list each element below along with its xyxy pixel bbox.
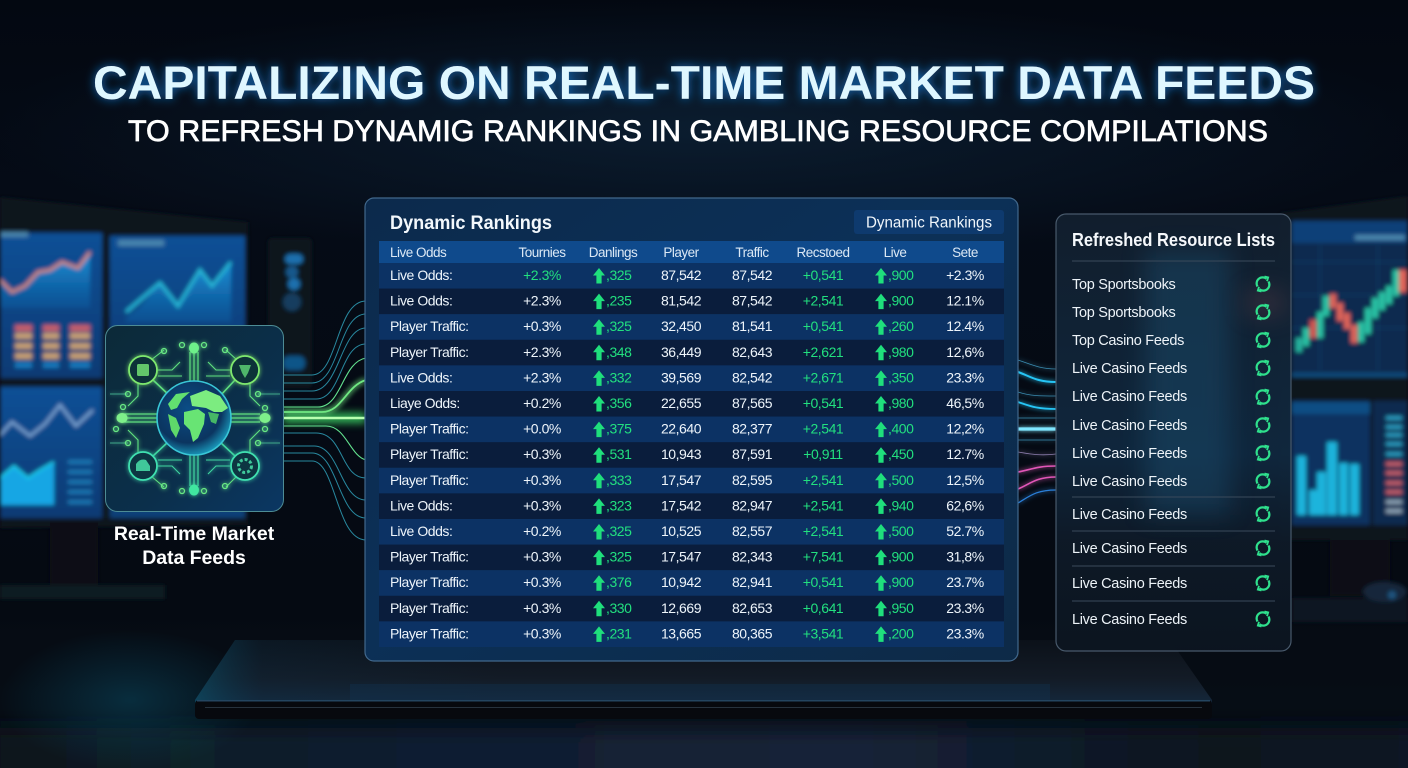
heading: data feeds label: Real-Time Market	[114, 523, 275, 545]
row 7: +2,541	[803, 421, 844, 437]
list item 4: Live Casino Feeds	[1072, 361, 1187, 377]
table header: Tournies	[518, 245, 566, 260]
row 10: Live Odds:	[390, 497, 452, 513]
row 4: +2.3%	[523, 344, 561, 360]
heading: data feeds label: Data Feeds	[142, 547, 246, 569]
row 1: +0,541	[803, 267, 844, 283]
row 5: +2.3%	[523, 369, 561, 385]
row 5: 82,542	[732, 369, 773, 385]
row 12: Player Traffic:	[390, 549, 469, 565]
table header	[379, 241, 1004, 263]
row 15: +3,541	[803, 625, 844, 641]
row 7: 12,2%	[946, 421, 984, 437]
row 6	[379, 391, 1004, 417]
row 6: ,980	[888, 395, 914, 411]
row 14: 82,653	[732, 600, 773, 616]
row 9: +0.3%	[523, 472, 561, 488]
list item 12: Live Casino Feeds	[1072, 612, 1187, 628]
button: dynamic rankings: Dynamic Rankings	[866, 214, 992, 232]
icon: document node	[129, 356, 157, 384]
table header: Live Odds	[390, 245, 447, 260]
row 11: 82,557	[732, 523, 773, 539]
circuit traces	[110, 348, 280, 490]
button: dynamic rankings	[854, 210, 1004, 234]
row 1: 87,542	[732, 267, 773, 283]
row 14: ,950	[888, 600, 914, 616]
list item 9	[1072, 506, 1269, 523]
row 5: 39,569	[661, 369, 702, 385]
row 3: 32,450	[661, 318, 702, 334]
row 6: +0.2%	[523, 395, 561, 411]
list item 2	[1072, 304, 1269, 321]
row 13: ,900	[888, 574, 914, 590]
row 13: +0,541	[803, 574, 844, 590]
list item 12	[1072, 612, 1269, 628]
row 12: ,900	[888, 549, 914, 565]
icon: cloud node	[129, 452, 157, 480]
row 4: 82,643	[732, 344, 773, 360]
row 11: ,325	[606, 523, 632, 539]
row 14	[379, 596, 1004, 621]
row 14: ,330	[606, 600, 632, 616]
panel heading: Dynamic Rankings	[390, 213, 552, 234]
list item 8: Live Casino Feeds	[1072, 474, 1187, 490]
row 6: Liaye Odds:	[390, 395, 460, 411]
row 5: +2,671	[803, 369, 844, 385]
row 10: +0.3%	[523, 497, 561, 513]
row 2: Live Odds:	[390, 293, 452, 309]
row 1: Live Odds:	[390, 267, 452, 283]
row 11	[379, 519, 1004, 545]
row 11: 52.7%	[946, 523, 984, 539]
row 9: 12,5%	[946, 472, 984, 488]
row 6: 46,5%	[946, 395, 984, 411]
row 8: ,450	[888, 446, 914, 462]
row 1: ,900	[888, 267, 914, 283]
list item 7: Live Casino Feeds	[1072, 446, 1187, 462]
row 13: Player Traffic:	[390, 574, 469, 590]
list item 10: Live Casino Feeds	[1072, 541, 1187, 557]
row 4: +2,621	[803, 344, 844, 360]
row 10: +2,541	[803, 497, 844, 513]
heading: data feeds label	[114, 523, 275, 569]
circuit nodes	[114, 342, 270, 496]
row 7: ,400	[888, 421, 914, 437]
row 14: +0,641	[803, 600, 844, 616]
table header: Recstoed	[796, 245, 850, 260]
row 4: ,348	[606, 344, 632, 360]
row 3	[379, 314, 1004, 340]
table header: Sete	[952, 245, 978, 260]
list item 5: Live Casino Feeds	[1072, 389, 1187, 405]
list item 10	[1072, 540, 1269, 557]
list item 2: Top Sportsbooks	[1072, 305, 1176, 321]
row 11: Live Odds:	[390, 523, 452, 539]
row 15: ,200	[888, 625, 914, 641]
row 6: +0,541	[803, 395, 844, 411]
row 1: ,325	[606, 267, 632, 283]
row 10: 82,947	[732, 497, 773, 513]
icon: network node	[231, 452, 259, 480]
panel: dynamic rankings	[365, 198, 1018, 661]
desk platform	[0, 630, 1408, 768]
row 12: 17,547	[661, 549, 702, 565]
row 13: 10,942	[661, 574, 702, 590]
row 4	[379, 340, 1004, 365]
rankings table	[379, 263, 1004, 647]
row 15	[379, 621, 1004, 647]
row 12: ,325	[606, 549, 632, 565]
row 2: 12.1%	[946, 293, 984, 309]
table header: Danlings	[589, 245, 638, 260]
row 13	[379, 570, 1004, 596]
table header: Live	[884, 245, 906, 260]
row 11: 10,525	[661, 523, 702, 539]
row 14: 12,669	[661, 600, 702, 616]
row 4: 36,449	[661, 344, 702, 360]
row 5: Live Odds:	[390, 369, 452, 385]
row 12: 82,343	[732, 549, 773, 565]
arrow: right data streams	[1018, 360, 1056, 503]
row 7: 22,640	[661, 421, 702, 437]
row 15: ,231	[606, 625, 632, 641]
list item 7	[1072, 446, 1269, 462]
row 8: Player Traffic:	[390, 446, 469, 462]
row 2: ,235	[606, 293, 632, 309]
row 15: +0.3%	[523, 625, 561, 641]
list item 8	[1072, 474, 1269, 490]
row 13: ,376	[606, 574, 632, 590]
row 9: ,333	[606, 472, 632, 488]
row 6: 87,565	[732, 395, 773, 411]
row 2: ,900	[888, 293, 914, 309]
row 6: ,356	[606, 395, 632, 411]
row 8: 87,591	[732, 446, 773, 462]
list item 1: Top Sportsbooks	[1072, 277, 1176, 293]
row 2: +2,541	[803, 293, 844, 309]
subtitle: TO REFRESH DYNAMIG RANKINGS IN GAMBLING RESOURCE COMPILATIONS	[128, 115, 1268, 148]
row 4: Player Traffic:	[390, 344, 469, 360]
row 3: +0.3%	[523, 318, 561, 334]
row 10: 17,542	[661, 497, 702, 513]
row 7: ,375	[606, 421, 632, 437]
row 2: +2.3%	[523, 293, 561, 309]
row 7	[379, 417, 1004, 442]
row 3: Player Traffic:	[390, 318, 469, 334]
title: CAPITALIZING ON REAL-TIME MARKET DATA FEEDS	[93, 56, 1315, 109]
list item 11	[1072, 576, 1269, 592]
table header: Traffic	[735, 245, 769, 260]
row 2	[379, 289, 1004, 314]
row 9: ,500	[888, 472, 914, 488]
list item 6: Live Casino Feeds	[1072, 418, 1187, 434]
row 1: +2.3%	[946, 267, 984, 283]
list item 6	[1072, 418, 1269, 434]
row 10	[379, 493, 1004, 519]
row 15: 80,365	[732, 625, 773, 641]
icon: brain node	[231, 356, 259, 384]
row 14: 23.3%	[946, 600, 984, 616]
arrow: left data streams	[283, 301, 366, 540]
row 9: 17,547	[661, 472, 702, 488]
row 8: +0,911	[803, 446, 843, 462]
row 10: ,323	[606, 497, 632, 513]
row 14: +0.3%	[523, 600, 561, 616]
row 13: 23.7%	[946, 574, 984, 590]
row 1	[379, 263, 1004, 289]
row 11: +2,541	[803, 523, 844, 539]
right background monitor	[1280, 196, 1408, 622]
row 9: Player Traffic:	[390, 472, 469, 488]
row 15: Player Traffic:	[390, 625, 469, 641]
list item 9: Live Casino Feeds	[1072, 507, 1187, 523]
row 3: 81,541	[732, 318, 773, 334]
row 9: +2,541	[803, 472, 844, 488]
list item 4	[1072, 360, 1269, 377]
panel: data feed icon card	[106, 326, 284, 512]
icon: globe	[157, 381, 231, 455]
row 8: ,531	[606, 446, 632, 462]
row 12	[379, 545, 1004, 570]
row 1: +2.3%	[523, 267, 561, 283]
panel: refreshed resource lists	[1056, 214, 1291, 651]
row 1: 87,542	[661, 267, 702, 283]
list heading: Refreshed Resource Lists	[1072, 230, 1275, 250]
row 13: +0.3%	[523, 574, 561, 590]
row 8: +0.3%	[523, 446, 561, 462]
row 9	[379, 468, 1004, 493]
list item 5	[1072, 389, 1269, 405]
row 4: 12,6%	[946, 344, 984, 360]
list item 3	[1072, 332, 1269, 349]
row 5: ,332	[606, 369, 632, 385]
row 10: 62,6%	[946, 497, 984, 513]
row 14: Player Traffic:	[390, 600, 469, 616]
row 11: ,500	[888, 523, 914, 539]
row 2: 81,542	[661, 293, 702, 309]
left background monitor	[0, 197, 312, 599]
list item 3: Top Casino Feeds	[1072, 333, 1184, 349]
row 3: 12.4%	[946, 318, 984, 334]
row 8: 10,943	[661, 446, 702, 462]
row 5	[379, 365, 1004, 391]
row 11: +0.2%	[523, 523, 561, 539]
row 8: 12.7%	[946, 446, 984, 462]
list item 11: Live Casino Feeds	[1072, 576, 1187, 592]
list item 1	[1072, 276, 1269, 293]
row 12: +7,541	[803, 549, 844, 565]
row 3: ,260	[888, 318, 914, 334]
row 7: +0.0%	[523, 421, 561, 437]
row 15: 23.3%	[946, 625, 984, 641]
row 15: 13,665	[661, 625, 702, 641]
row 7: Player Traffic:	[390, 421, 469, 437]
table header: Player	[663, 245, 700, 260]
row 13: 82,941	[732, 574, 773, 590]
row 6: 22,655	[661, 395, 702, 411]
row 2: 87,542	[732, 293, 773, 309]
row 9: 82,595	[732, 472, 773, 488]
row 5: ,350	[888, 369, 914, 385]
row 3: ,325	[606, 318, 632, 334]
row 12: 31,8%	[946, 549, 984, 565]
row 5: 23.3%	[946, 369, 984, 385]
row 12: +0.3%	[523, 549, 561, 565]
row 8	[379, 442, 1004, 468]
row 4: ,980	[888, 344, 914, 360]
row 7: 82,377	[732, 421, 773, 437]
row 10: ,940	[888, 497, 914, 513]
row 3: +0,541	[803, 318, 844, 334]
